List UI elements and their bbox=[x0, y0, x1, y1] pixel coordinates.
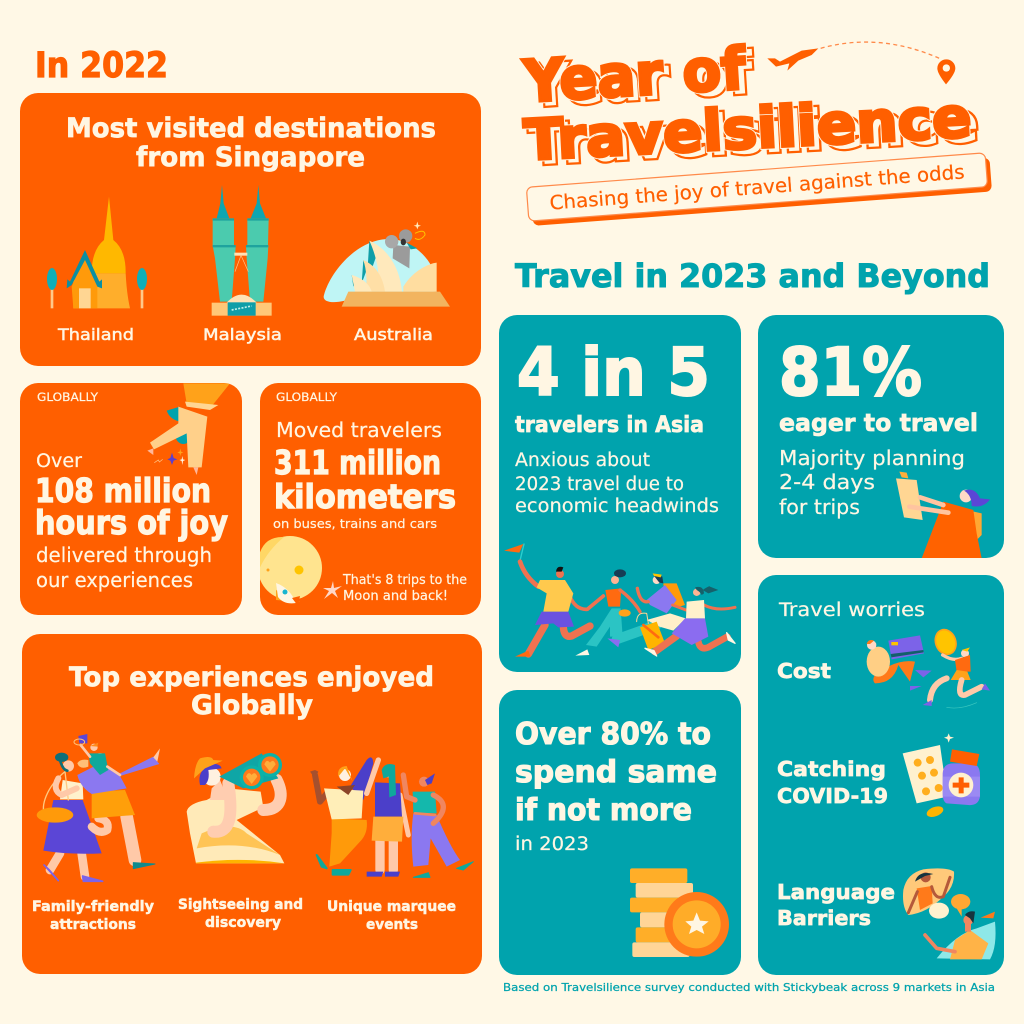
worry: cost: Cost bbox=[777, 659, 831, 683]
moon trips note: That's 8 trips to the bbox=[342, 573, 467, 588]
label: sightseeing and discovery: discovery bbox=[205, 915, 282, 931]
worry: catching COVID-19: Catching bbox=[777, 757, 886, 781]
description bbox=[779, 446, 965, 519]
stat: spend same if not more bbox=[515, 717, 717, 855]
label: Thailand: Thailand bbox=[57, 325, 134, 344]
panel heading bbox=[69, 662, 434, 721]
illustration: people with card and coin bbox=[867, 627, 990, 708]
illustration: traveler with map bbox=[896, 472, 990, 558]
panel: top experiences bbox=[22, 634, 482, 974]
description bbox=[515, 450, 719, 517]
panel heading: Globally bbox=[191, 690, 313, 721]
moon trips note: Moon and back! bbox=[343, 589, 448, 604]
stat: 4 in 5 bbox=[515, 334, 710, 438]
label: Australia: Australia bbox=[354, 325, 433, 344]
moon trips note bbox=[342, 573, 467, 604]
icon: sprinkling figure bbox=[147, 383, 230, 475]
stat: 108 million hours of joy: Over bbox=[36, 450, 82, 472]
panel heading: from Singapore bbox=[136, 142, 365, 173]
illustration: family bbox=[37, 734, 160, 881]
label: sightseeing and discovery: Sightseeing and bbox=[178, 897, 303, 913]
tag: globally: GLOBALLY bbox=[37, 390, 99, 404]
stat: 311 million kilometers: on buses, trains and cars bbox=[273, 516, 437, 531]
icon: moon and rocket bbox=[258, 536, 322, 606]
title: Year of Travelsilience: Travelsilience bbox=[522, 86, 973, 174]
illustration: people talking bbox=[903, 868, 996, 959]
heading: Travel in 2023 and Beyond: Travel in 2023 and Beyond bbox=[515, 257, 990, 295]
worry: catching COVID-19: COVID-19 bbox=[777, 784, 888, 808]
stat: 108 million hours of joy: 108 million bbox=[35, 471, 211, 510]
stat: 108 million hours of joy: hours of joy bbox=[35, 503, 228, 542]
stat: 108 million hours of joy: our experiences bbox=[36, 568, 193, 592]
icon: Sydney opera house with koala bbox=[324, 222, 450, 307]
stat: spend same if not more: spend same bbox=[515, 755, 717, 790]
stat: 311 million kilometers: 311 million bbox=[274, 443, 441, 482]
description: Majority planning bbox=[779, 446, 965, 470]
title: Year of Travelsilience: Travelsilience bbox=[528, 90, 980, 179]
title: Year of Travelsilience bbox=[521, 34, 980, 179]
panel: kilometers moved bbox=[258, 383, 481, 615]
description: for trips bbox=[779, 495, 860, 519]
stat: 311 million kilometers: kilometers bbox=[274, 477, 456, 516]
heading: In 2022: In 2022 bbox=[35, 46, 168, 86]
label: unique marquee events: events bbox=[366, 917, 418, 933]
label: unique marquee events: Unique marquee bbox=[327, 899, 456, 915]
label: family-friendly attractions: Family-friendly bbox=[32, 899, 155, 915]
footer: survey source: Based on Travelsilience survey conducted with Stickybeak across 9 markets in Asia bbox=[503, 981, 995, 994]
description: 2023 travel due to bbox=[515, 474, 684, 495]
icon: airplane and dashed route to pin bbox=[767, 42, 955, 84]
illustration: sightseer with binoculars bbox=[187, 753, 284, 863]
panel: 81 percent eager to travel bbox=[758, 315, 1004, 558]
panel heading: Top experiences enjoyed bbox=[69, 662, 434, 693]
worry: language barriers bbox=[777, 880, 895, 930]
panel: over 80 percent to spend bbox=[499, 690, 741, 975]
stat: 81%: eager to travel bbox=[779, 409, 978, 437]
stat: 108 million hours of joy: delivered through bbox=[36, 543, 212, 567]
stat: 311 million kilometers: Moved travelers bbox=[276, 418, 442, 442]
worry: language barriers: Language bbox=[777, 880, 895, 904]
label: family-friendly attractions bbox=[32, 899, 155, 933]
stat: 4 in 5: 4 in 5 bbox=[517, 334, 710, 411]
label: Malaysia: Malaysia bbox=[203, 325, 282, 344]
stat: 81% bbox=[779, 334, 978, 437]
worry: language barriers: Barriers bbox=[777, 906, 871, 930]
title: Year of Travelsilience: Year of bbox=[521, 34, 748, 116]
panel: hours of joy bbox=[20, 383, 242, 615]
label: sightseeing and discovery bbox=[178, 897, 303, 931]
label: family-friendly attractions: attractions bbox=[50, 917, 136, 933]
stat: 108 million hours of joy bbox=[35, 450, 228, 592]
panel heading: Travel worries bbox=[778, 600, 925, 621]
illustration: running travelers bbox=[504, 544, 735, 657]
stat: spend same if not more: Over 80% to bbox=[515, 717, 711, 752]
illustration: concert group bbox=[310, 757, 473, 877]
icon: sparkle star bbox=[323, 581, 342, 599]
tagline ribbon bbox=[526, 153, 992, 226]
icon: Thailand temple bbox=[47, 197, 147, 308]
panel: travel worries bbox=[758, 575, 1004, 975]
tagline ribbon: Chasing the joy of travel against the odds bbox=[549, 160, 965, 215]
panel: most visited destinations bbox=[20, 93, 481, 366]
description: Anxious about bbox=[515, 450, 650, 471]
icon: coin stack bbox=[630, 868, 729, 957]
panel heading bbox=[66, 113, 436, 173]
icon: Petronas towers bbox=[212, 185, 272, 316]
title: Year of Travelsilience: Travelsilience bbox=[522, 86, 973, 174]
stat: 4 in 5: travelers in Asia bbox=[515, 413, 704, 438]
description: economic headwinds bbox=[515, 496, 719, 517]
stat: 311 million kilometers bbox=[273, 418, 456, 531]
panel: 4 in 5 travelers bbox=[499, 315, 741, 672]
title: Year of Travelsilience: Year of bbox=[521, 34, 748, 116]
stat: spend same if not more: if not more bbox=[515, 793, 692, 828]
worry: catching COVID-19 bbox=[777, 757, 888, 808]
stat: spend same if not more: in 2023 bbox=[515, 834, 589, 855]
stat: 81%: 81% bbox=[779, 334, 922, 411]
description: 2-4 days bbox=[779, 470, 875, 494]
panel heading: Most visited destinations bbox=[66, 113, 436, 144]
label: unique marquee events bbox=[327, 899, 456, 933]
illustration: pills and medicine bottle bbox=[903, 733, 980, 819]
tag: globally: GLOBALLY bbox=[276, 390, 338, 404]
title: Year of Travelsilience: Year of bbox=[526, 39, 755, 121]
